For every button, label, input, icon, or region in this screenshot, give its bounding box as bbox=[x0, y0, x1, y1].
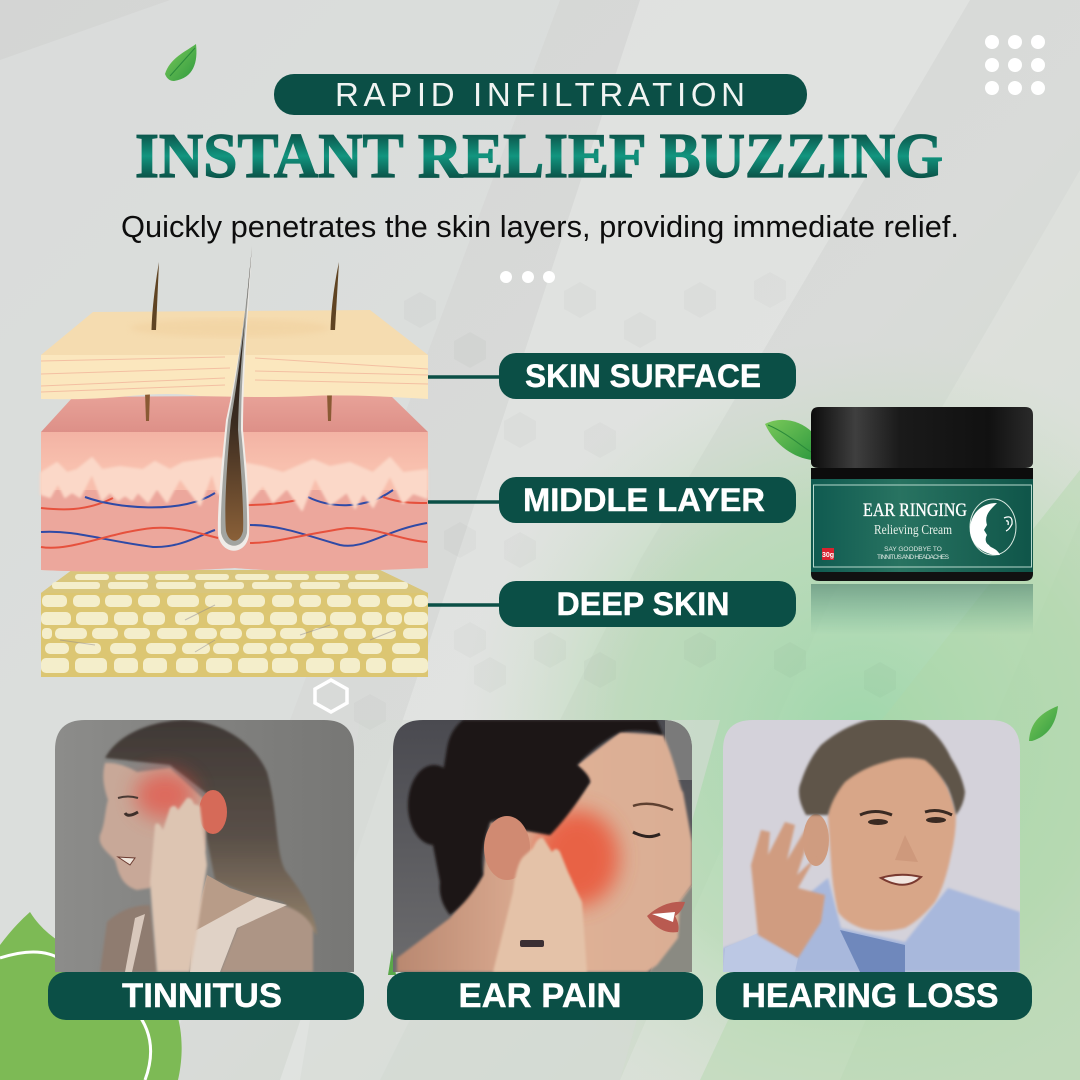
eyes and brows bbox=[860, 811, 952, 815]
photo: hearing loss bbox=[723, 718, 1020, 972]
label: hearing loss bbox=[716, 972, 1032, 1020]
jar face icon bbox=[970, 499, 1016, 555]
icon: leaf top left bbox=[165, 44, 196, 81]
right shoulder bbox=[220, 905, 313, 972]
top strap bbox=[190, 897, 287, 972]
thin hairs bbox=[152, 262, 159, 330]
jar label text: EAR RINGING bbox=[863, 500, 967, 521]
ear bbox=[484, 816, 530, 880]
photo: tinnitus bbox=[55, 720, 354, 972]
face bbox=[828, 755, 956, 931]
label: ear pain bbox=[387, 972, 703, 1020]
label: ear pain: EAR PAIN bbox=[458, 977, 622, 1015]
hand bbox=[150, 798, 207, 972]
dots bbox=[500, 271, 555, 283]
jar label text bbox=[822, 500, 967, 561]
label: tinnitus bbox=[48, 972, 364, 1020]
neck bbox=[196, 875, 257, 930]
subtitle: Quickly penetrates the skin layers, providing immediate relief. bbox=[121, 209, 959, 244]
main hair follicle bbox=[218, 246, 252, 551]
face bbox=[100, 763, 207, 890]
sleeve bbox=[723, 933, 798, 972]
nose shadow bbox=[895, 835, 918, 862]
ring bbox=[520, 940, 544, 947]
photo: ear pain bbox=[393, 720, 692, 972]
heading pill: rapid infiltration bbox=[274, 74, 807, 115]
eye and mouth bbox=[125, 812, 138, 815]
collar shadow bbox=[840, 930, 905, 972]
hexagon outline bbox=[315, 680, 347, 712]
deep skin layer bbox=[41, 570, 428, 677]
surface layer bbox=[41, 310, 428, 399]
middle layer bbox=[41, 395, 428, 572]
icon: leaf bottom right bbox=[1029, 706, 1058, 741]
product jar bbox=[811, 407, 1033, 634]
label: middle layer bbox=[499, 477, 796, 523]
eye, brow and lips bbox=[633, 832, 660, 837]
raised hand bbox=[751, 822, 825, 958]
heading pill: rapid infiltration: RAPID INFILTRATION bbox=[335, 76, 745, 113]
ear bbox=[803, 814, 829, 866]
icon: dot grid top right bbox=[985, 35, 1045, 95]
connector lines bbox=[428, 377, 505, 605]
mouth bbox=[881, 875, 921, 885]
label: skin surface bbox=[499, 353, 796, 399]
ear bbox=[199, 790, 227, 834]
title: INSTANT RELIEF BUZZING bbox=[135, 120, 943, 191]
label: middle layer: MIDDLE LAYER bbox=[523, 482, 765, 518]
shirt bbox=[723, 878, 1020, 972]
label: skin surface: SKIN SURFACE bbox=[525, 358, 761, 394]
left arm bbox=[100, 905, 157, 972]
jar label text: SAY GOODBYE TO bbox=[884, 546, 942, 553]
label: hearing loss: HEARING LOSS bbox=[742, 977, 998, 1015]
hair and bun bbox=[408, 720, 663, 915]
pain glow bbox=[535, 810, 619, 906]
label: deep skin: DEEP SKIN bbox=[556, 586, 730, 622]
hair bbox=[799, 718, 965, 815]
label: deep skin bbox=[499, 581, 796, 627]
icon: leaf behind jar bbox=[765, 420, 812, 460]
small hair roots bbox=[145, 392, 150, 421]
pain glow bbox=[135, 771, 195, 819]
skin diagram bbox=[41, 246, 428, 677]
label: tinnitus: TINNITUS bbox=[122, 977, 282, 1015]
light band bbox=[41, 458, 427, 510]
jar label text: TINNITUS AND HEADACHES bbox=[877, 554, 950, 561]
face and neck bbox=[397, 732, 692, 972]
jar label text: 30g bbox=[822, 552, 834, 559]
blood vessels bbox=[41, 490, 427, 548]
jar label text: Relieving Cream bbox=[874, 523, 952, 538]
long hair bbox=[105, 720, 317, 935]
jar reflection bbox=[811, 584, 1033, 634]
hand bbox=[493, 838, 587, 972]
